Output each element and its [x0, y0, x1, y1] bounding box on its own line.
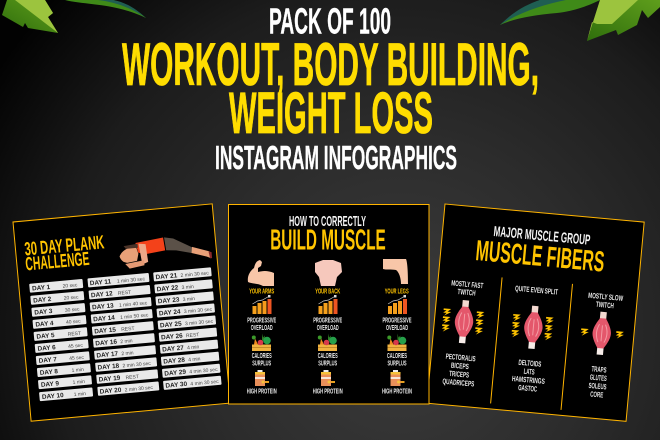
table: days 1 to 10: DAY 1	[32, 284, 51, 293]
column: quite even split: HAMSTRINGS	[512, 374, 545, 386]
column: your arms: CALORIES	[252, 351, 272, 360]
column: your back: OVERLOAD	[317, 323, 339, 332]
table: days 11 to 20: DAY 14	[93, 314, 116, 323]
column: your legs: YOUR LEGS	[385, 288, 409, 295]
column: your arms: HIGH PROTEIN	[247, 386, 277, 395]
column: your legs: CALORIES	[387, 351, 407, 360]
column: your arms	[247, 260, 277, 395]
table: days 21 to 30: DAY 22	[156, 284, 179, 293]
table: days 1 to 10: DAY 10	[42, 392, 64, 401]
heading: build muscle: BUILD MUSCLE	[270, 224, 386, 256]
column: your legs: HIGH PROTEIN	[382, 386, 412, 395]
table: days 11 to 20: DAY 15	[94, 326, 117, 335]
icon: person planking	[118, 233, 212, 269]
table: days 21 to 30: REST	[186, 332, 200, 339]
table: days 11 to 20: DAY 16	[95, 339, 118, 348]
column: your back: SURPLUS	[318, 358, 337, 367]
column: quite even split: DELTOIDS	[518, 358, 542, 369]
table: days 1 to 10: 20 sec	[64, 294, 79, 302]
icon: leaves top right	[500, 0, 660, 41]
table: days 21 to 30: 4 min	[188, 356, 201, 363]
column: your back	[313, 260, 343, 395]
table: days 11 to 20: REST	[125, 374, 139, 381]
column: mostly slow twitch: TRAPS	[591, 364, 607, 375]
column: mostly slow twitch: MOSTLY SLOW	[588, 291, 624, 303]
table: days 1 to 10: DAY 2	[33, 296, 52, 305]
column: mostly slow twitch: CORE	[590, 389, 604, 400]
column: your legs	[382, 259, 412, 395]
table: days 21 to 30: 3 min	[181, 284, 194, 291]
heading: plank challenge: 30 DAY PLANK	[24, 232, 105, 261]
table: days 11 to 20: 1 min 50 sec	[120, 312, 149, 321]
column: mostly fast twitch: BICEPS	[451, 361, 469, 371]
column: your legs: PROGRESSIVE	[382, 316, 412, 325]
table: days 21 to 30: DAY 28	[163, 357, 186, 366]
column: your back: PROGRESSIVE	[313, 316, 342, 325]
table: days 11 to 20: 2 min 30 sec	[122, 361, 152, 369]
panel: build muscle	[228, 204, 429, 404]
column: your legs: OVERLOAD	[386, 323, 408, 332]
table: days 21 to 30	[153, 267, 222, 390]
heading: plank challenge: CHALLENGE	[25, 249, 90, 275]
column: quite even split	[506, 284, 559, 395]
table: days 21 to 30: 4 min 30 sec	[189, 367, 218, 375]
table: days 1 to 10: 20 sec	[62, 282, 78, 290]
table: days 11 to 20: 2 min	[121, 350, 134, 357]
column: mostly fast twitch	[437, 278, 487, 389]
table: days 1 to 10: DAY 3	[34, 308, 53, 317]
column: mostly fast twitch: TRICEPS	[449, 369, 469, 380]
table: days 11 to 20: 2 min	[120, 338, 133, 345]
table: days 21 to 30: 3 min 30 sec	[184, 307, 213, 315]
table: days 11 to 20: 1 min 40 sec	[119, 300, 148, 309]
table: days 21 to 30: DAY 24	[159, 308, 181, 317]
table: days 11 to 20	[87, 273, 159, 396]
panel: muscle fibers	[427, 204, 644, 421]
column: mostly slow twitch: SOLEUS	[588, 381, 607, 391]
column: your legs: SURPLUS	[388, 358, 406, 367]
table: days 1 to 10: DAY 4	[35, 320, 54, 329]
column: mostly fast twitch: MOSTLY FAST	[451, 278, 484, 290]
column: your arms: PROGRESSIVE	[247, 316, 276, 325]
column: mostly slow twitch	[575, 290, 628, 401]
table: days 1 to 10: 1 min	[71, 367, 84, 374]
table: days 11 to 20: 2 min 30 sec	[124, 385, 154, 393]
column: your arms: OVERLOAD	[251, 323, 273, 332]
table: days 11 to 20: DAY 18	[97, 363, 120, 372]
column: mostly fast twitch: TWITCH	[457, 287, 476, 298]
column: quite even split: GASTOC	[518, 383, 538, 394]
column: mostly slow twitch: GLUTES	[589, 373, 607, 383]
table: days 21 to 30: 3 min 30 sec	[185, 319, 214, 327]
table: days 1 to 10: 40 sec	[66, 319, 81, 326]
column: your back: CALORIES	[318, 351, 338, 360]
heading: pack of 100: PACK OF 100	[269, 0, 391, 42]
table: days 21 to 30: 4 min 30 sec	[190, 379, 219, 387]
table: days 11 to 20: DAY 13	[92, 302, 114, 311]
table: days 21 to 30: 2 min 30 sec	[180, 270, 210, 279]
column: mostly slow twitch: TWITCH	[596, 300, 614, 310]
table: days 21 to 30: DAY 23	[158, 296, 180, 305]
column: quite even split: QUITE EVEN SPLIT	[515, 284, 559, 297]
table: days 21 to 30: 4 min	[187, 344, 200, 351]
table: days 11 to 20: 1 min 30 sec	[117, 276, 146, 285]
table: days 11 to 20: DAY 19	[98, 375, 121, 384]
table: days 1 to 10	[29, 279, 93, 401]
table: days 11 to 20: DAY 11	[90, 278, 112, 287]
icon: leaves top left	[2, 0, 146, 33]
heading: weight loss: WEIGHT LOSS	[229, 81, 433, 146]
table: days 11 to 20: DAY 12	[91, 290, 113, 299]
table: days 1 to 10: DAY 6	[37, 344, 56, 353]
column: mostly fast twitch: QUADRICEPS	[442, 377, 475, 389]
table: days 1 to 10: REST	[68, 331, 81, 338]
column: your arms: SURPLUS	[252, 358, 271, 367]
table: days 21 to 30: DAY 25	[160, 321, 182, 329]
table: days 21 to 30: DAY 21	[155, 272, 178, 281]
icon: bent leg	[383, 259, 408, 284]
table: days 1 to 10: DAY 8	[40, 368, 59, 377]
table: days 1 to 10: 30 sec	[65, 306, 80, 314]
column: your back: HIGH PROTEIN	[313, 386, 343, 395]
icon: flexed arm	[248, 260, 274, 286]
table: days 21 to 30: DAY 30	[165, 381, 188, 390]
table: days 21 to 30: DAY 26	[161, 333, 183, 342]
table: days 21 to 30: DAY 27	[162, 345, 185, 354]
icon: muscular back	[315, 260, 342, 286]
table: days 1 to 10: DAY 7	[38, 356, 58, 365]
column: quite even split: LATS	[523, 367, 535, 377]
column: mostly fast twitch: PECTORALIS	[445, 352, 476, 363]
table: days 1 to 10: 1 min	[74, 391, 86, 398]
column: your arms: YOUR ARMS	[249, 288, 274, 295]
table: days 11 to 20: REST	[118, 290, 132, 297]
table: days 11 to 20: REST	[121, 326, 135, 333]
column: your back: YOUR BACK	[315, 288, 340, 295]
table: days 1 to 10: 45 sec	[69, 355, 85, 362]
table: days 21 to 30: 3 min	[183, 296, 195, 303]
table: days 1 to 10: 45 sec	[68, 343, 84, 350]
heading: plank challenge	[23, 232, 107, 275]
table: days 1 to 10: 1 min	[72, 379, 85, 386]
table: days 1 to 10: DAY 9	[41, 380, 60, 389]
table: days 11 to 20: DAY 20	[99, 387, 122, 396]
table: days 21 to 30: DAY 29	[164, 369, 187, 378]
table: days 11 to 20: DAY 17	[96, 351, 119, 360]
table: days 1 to 10: DAY 5	[36, 332, 55, 341]
panel: 30 day plank challenge	[13, 204, 230, 421]
heading: how to correctly: HOW TO CORRECTLY	[289, 214, 366, 230]
